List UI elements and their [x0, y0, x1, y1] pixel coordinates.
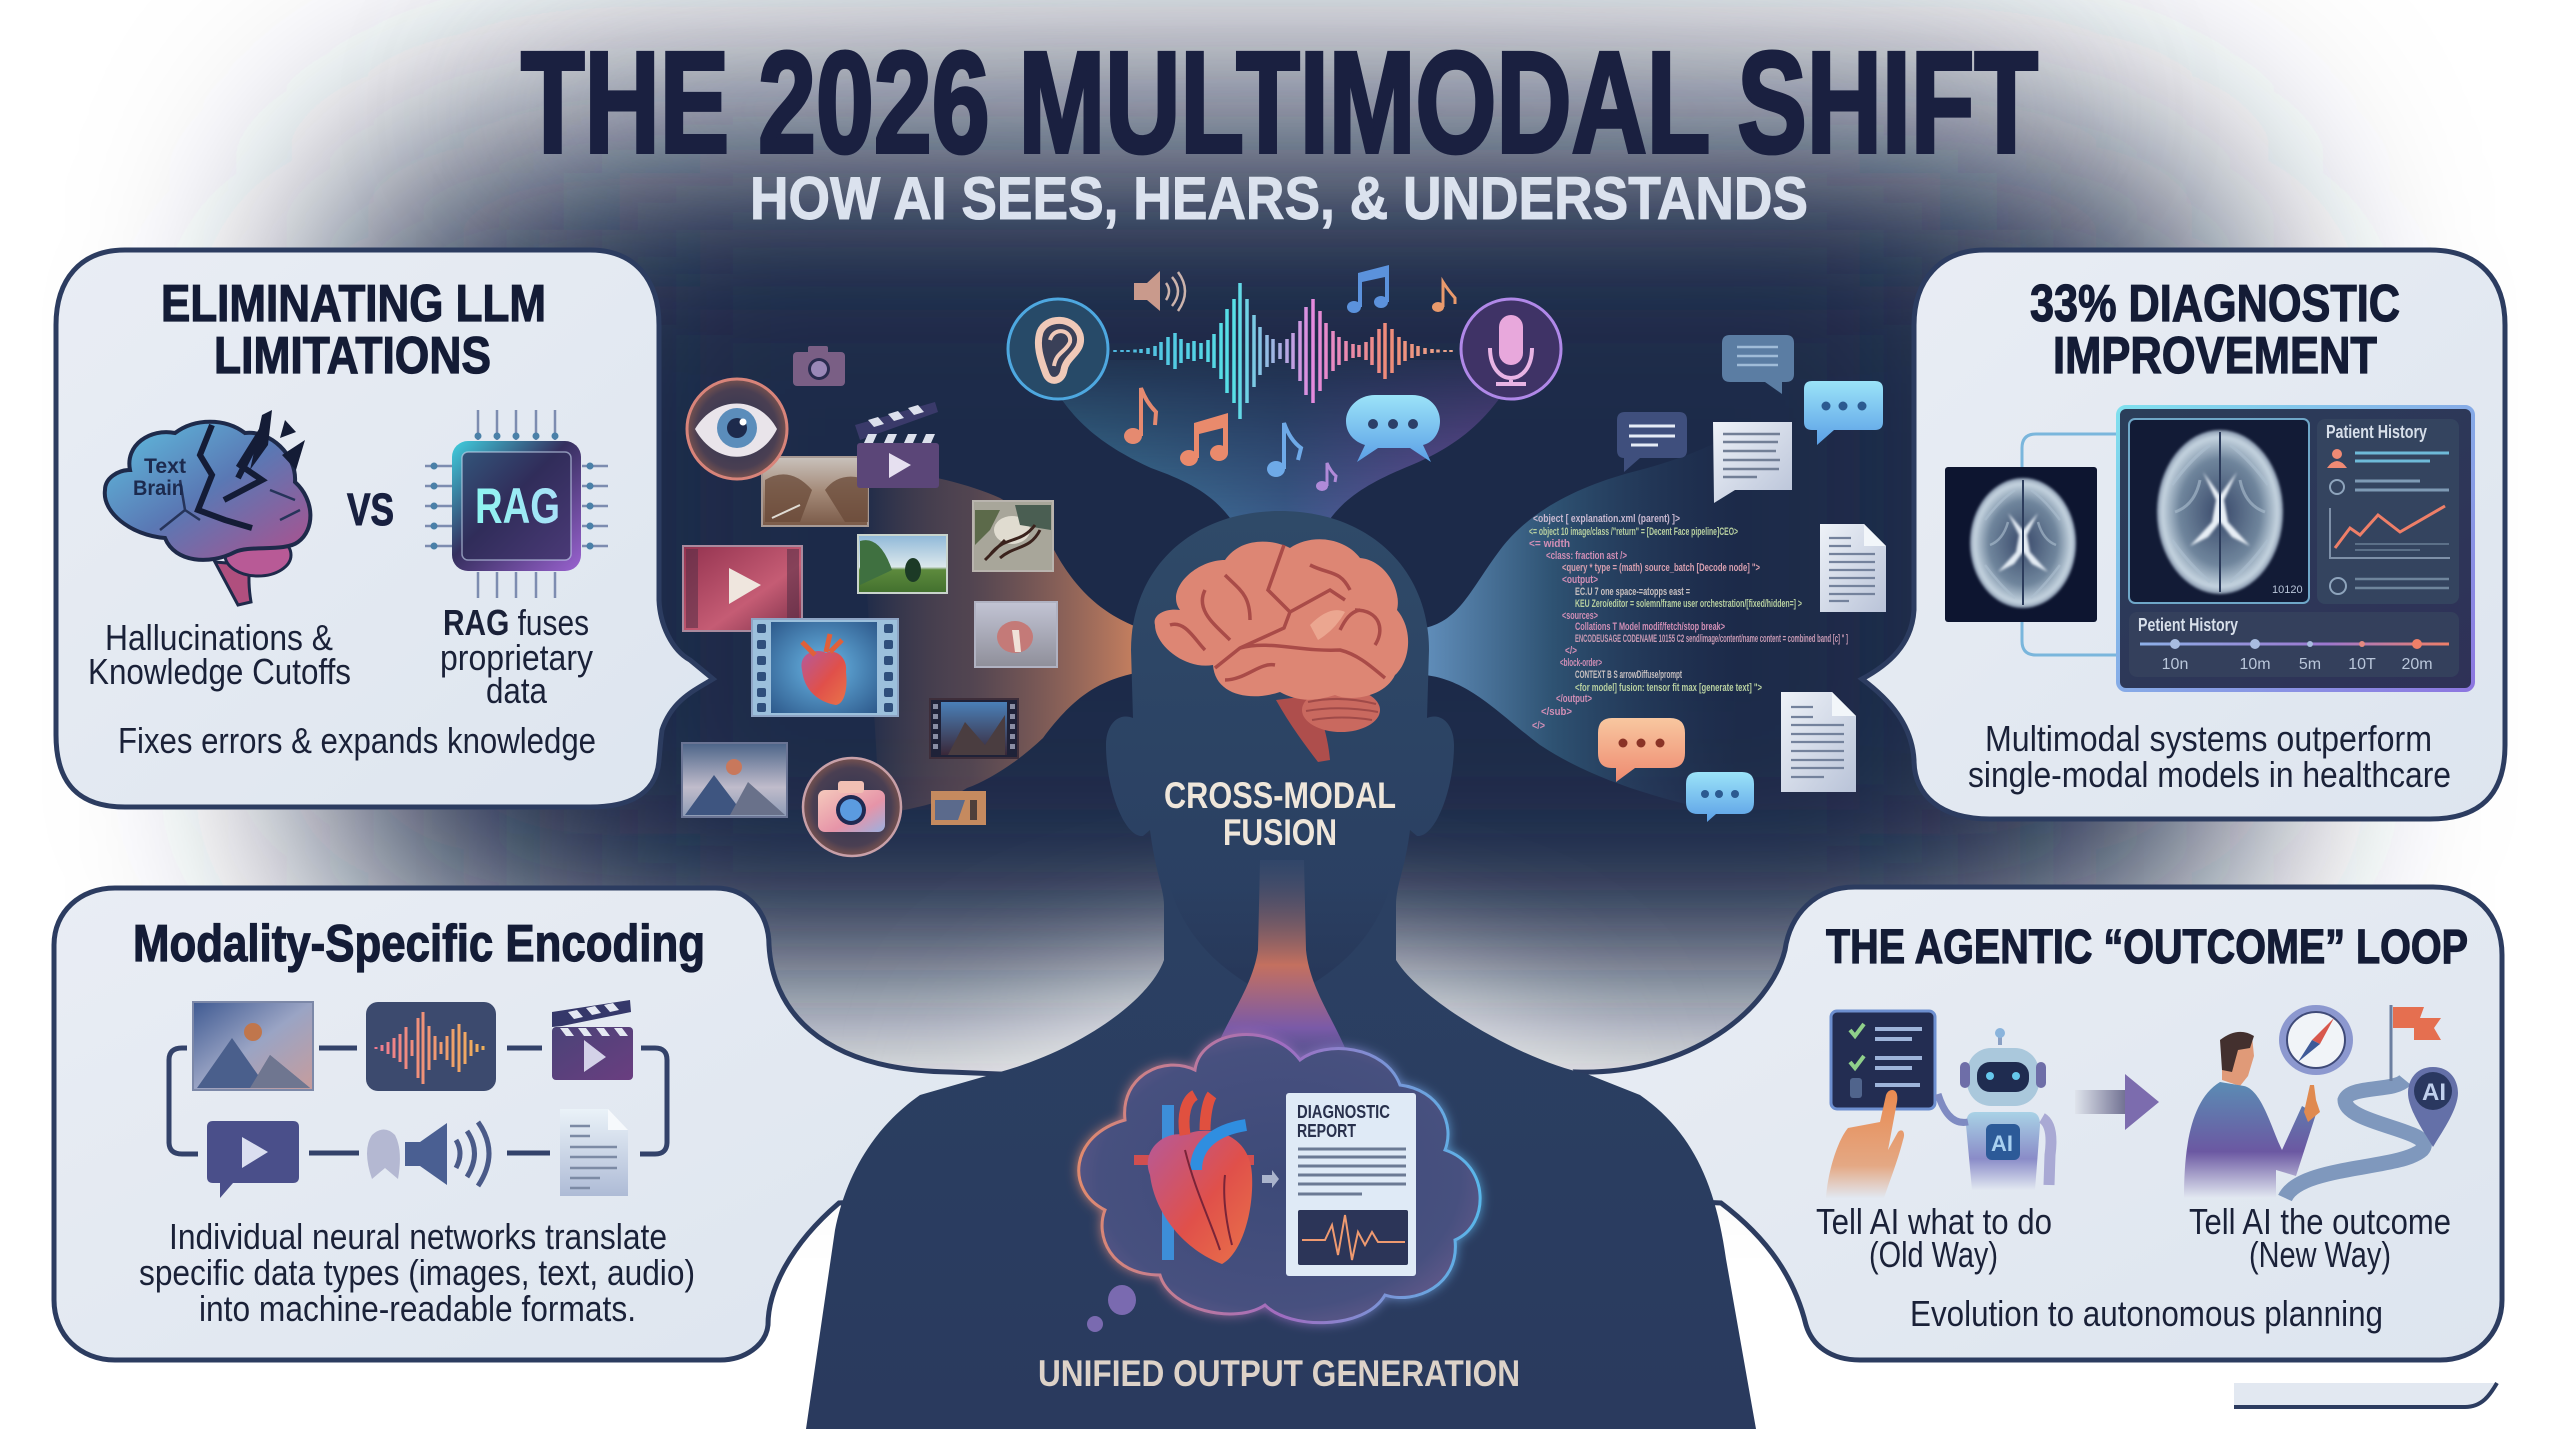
- caption: RAG fuses: [440, 602, 593, 711]
- encoding loop connectors: [169, 1048, 667, 1154]
- caption: specific data types (images, text, audio): [139, 1252, 695, 1293]
- icon: small camera: [793, 346, 845, 386]
- caption: RAG fuses: data: [486, 670, 548, 711]
- takeaway: Evolution to autonomous planning: [1910, 1293, 2383, 1334]
- label: Text: [144, 455, 186, 478]
- photo: green landscape: [858, 535, 947, 593]
- photo: dusk road: [973, 501, 1053, 571]
- caption: single-modal models in healthcare: [1968, 754, 2451, 795]
- timeline card: [2129, 612, 2459, 677]
- video: dark film: [930, 699, 1018, 758]
- code snippet: <block-order>: [1560, 657, 1602, 669]
- small arrow: [1262, 1170, 1279, 1188]
- heading: [2030, 275, 2400, 385]
- corner fragment: [2234, 1383, 2497, 1407]
- icon: document: [560, 1109, 628, 1196]
- icon: robot: [1938, 1028, 2051, 1190]
- subtitle: HOW AI SEES, HEARS, & UNDERSTANDS: [750, 165, 1808, 232]
- caption: Individual neural networks translate: [169, 1216, 667, 1257]
- caption: hallucinations: Hallucinations &: [105, 617, 333, 658]
- icon: blue note: [1267, 423, 1301, 477]
- monitor dashboard: [2118, 407, 2473, 690]
- timeline card: 10m: [2239, 656, 2271, 673]
- icon: clapperboard: [855, 402, 939, 488]
- icon: image: [193, 1002, 313, 1090]
- caption: RAG fuses: RAG fuses: [443, 602, 589, 643]
- photo: misty figure: [975, 602, 1057, 667]
- label: cross-modal fusion: FUSION: [1223, 812, 1337, 853]
- icon: flag: [2391, 1005, 2441, 1081]
- central brain: [1155, 539, 1408, 762]
- icon: camera: [803, 758, 901, 856]
- icon: eye: [687, 379, 787, 479]
- heading: IMPROVEMENT: [2053, 327, 2377, 385]
- timeline card: 10n: [2162, 656, 2188, 673]
- caption: old way: (Old Way): [1869, 1234, 1998, 1275]
- code snippet: <query * type = (math) source_batch [Decode node] ">: [1562, 562, 1760, 574]
- timeline card: 20m: [2401, 656, 2433, 673]
- heading: Modality-Specific Encoding: [133, 915, 705, 973]
- label: cross-modal fusion: [1164, 775, 1396, 853]
- thought dots: [1087, 1285, 1136, 1332]
- icon: speaker: [367, 1122, 489, 1186]
- timeline card: Petient History: [2138, 615, 2238, 635]
- diagnostic report: [1286, 1093, 1416, 1276]
- patient history card: Patient History: [2326, 422, 2427, 442]
- panel: eliminating LLM limitations: [56, 250, 713, 807]
- caption: old way: [1816, 1201, 2052, 1275]
- caption: [1968, 718, 2451, 795]
- audio waveform: [1115, 283, 1451, 419]
- code snippet: <for model] fusion: tensor fit max [generate text] ">: [1575, 682, 1762, 694]
- thought cloud: [1079, 1035, 1480, 1332]
- icon: person: [2184, 1032, 2320, 1198]
- versus: VS: [347, 484, 394, 535]
- label: cross-modal fusion: CROSS-MODAL: [1164, 775, 1396, 816]
- takeaway: Fixes errors & expands knowledge: [118, 720, 596, 761]
- icon: robot: AI: [1991, 1131, 2013, 1156]
- code snippet: Collations T Model modif/fetch/stop break>: [1575, 621, 1725, 633]
- icon: blue double note: [1347, 265, 1389, 313]
- code snippet: <sources>: [1562, 610, 1598, 622]
- icon: document: [1820, 524, 1886, 612]
- large MRI scan: [2129, 419, 2309, 603]
- bubble: blue dots: [1686, 772, 1754, 822]
- icon: ear: [1008, 299, 1108, 399]
- icon: small orange note: [1432, 282, 1455, 312]
- caption: Multimodal systems outperform: [1985, 718, 2432, 759]
- small MRI scan: [1945, 467, 2097, 622]
- bubble: orange dots: [1598, 718, 1685, 782]
- caption: into machine-readable formats.: [199, 1288, 636, 1329]
- code snippet: <= object 10 image/class /"return" = [Decent Face pipeline]CEO>: [1529, 526, 1738, 538]
- icon: waveform box: [366, 1002, 496, 1091]
- caption: RAG fuses: proprietary: [440, 637, 593, 678]
- icon: microphone: [1461, 299, 1561, 399]
- icon: location pin: AI: [2422, 1079, 2446, 1106]
- patient history card: [2317, 419, 2459, 604]
- icon: video bubble: [207, 1121, 299, 1198]
- code snippet: ENCODEUSAGE CODENAME 10155 C2 send/image/content/name content = combined band [c] " ]: [1575, 633, 1848, 645]
- photo: road: [762, 457, 868, 526]
- bubble: dark lines: [1617, 412, 1687, 472]
- caption: new way: (New Way): [2249, 1234, 2391, 1275]
- code snippet: </sub>: [1541, 706, 1572, 718]
- panel: modality-specific encoding: [54, 888, 1000, 1360]
- diagnostic report: REPORT: [1297, 1121, 1356, 1141]
- heading: LIMITATIONS: [214, 327, 491, 385]
- code snippet: <output>: [1562, 574, 1598, 586]
- video: pink play: [683, 546, 802, 631]
- caption: new way: Tell AI the outcome: [2189, 1201, 2451, 1242]
- code snippet: KEU Zero/editor = solemn/frame user orchestration/[fixed/hidden=] >: [1575, 598, 1802, 610]
- icon: orange double note: [1180, 413, 1228, 466]
- icon: RAG chip: RAG: [475, 478, 560, 534]
- icon: RAG chip: [425, 410, 608, 598]
- code snippet: </>: [1565, 645, 1577, 657]
- timeline card: 5m: [2299, 656, 2321, 673]
- caption: old way: Tell AI what to do: [1816, 1201, 2052, 1242]
- caption: hallucinations: Knowledge Cutoffs: [88, 651, 351, 692]
- code snippet: <= width: [1529, 538, 1570, 550]
- diagnostic report: DIAGNOSTIC: [1297, 1102, 1390, 1122]
- panel: 33% diagnostic improvement: [1862, 250, 2505, 819]
- heading: [161, 275, 546, 385]
- code snippet: <class: fraction ast />: [1546, 550, 1627, 562]
- video: heart film: [752, 619, 898, 716]
- icon: checklist: [1831, 1011, 1935, 1109]
- head and body silhouette: [806, 511, 1756, 1429]
- flow: text stream: [1425, 435, 1760, 820]
- bubble: cyan dots: [1804, 381, 1883, 445]
- heading: ELIMINATING LLM: [161, 275, 546, 333]
- flow: visual stream: [860, 470, 1140, 815]
- label: Brain: [133, 477, 184, 500]
- photo: mountain: [682, 743, 787, 817]
- icon: location pin: [2408, 1067, 2458, 1147]
- icon: speaker: [1134, 271, 1185, 311]
- icon: orange note: [1124, 388, 1156, 444]
- caption: [139, 1216, 695, 1329]
- icon: document: [1781, 692, 1856, 792]
- bubble: white lines: [1713, 422, 1792, 503]
- icon: purple note: [1316, 463, 1336, 491]
- photo: orange thumbnail: [931, 791, 986, 825]
- large MRI scan: 10120: [2272, 584, 2303, 596]
- code snippet: CONTEXT B S arrowDiffuse/prompt: [1575, 669, 1682, 681]
- title: THE 2026 MULTIMODAL SHIFT: [521, 22, 2038, 183]
- code snippet: </>: [1532, 720, 1545, 732]
- icon: compass: [2279, 1005, 2353, 1075]
- arrow: [2075, 1074, 2159, 1130]
- neck glow: [1212, 860, 1350, 1060]
- icon: hand: [1826, 1090, 1904, 1198]
- icon: road: [2285, 1080, 2424, 1198]
- code snippet: EC.U 7 one space-=atopps east =: [1575, 586, 1690, 598]
- caption: hallucinations: [88, 617, 351, 692]
- caption: new way: [2189, 1201, 2451, 1275]
- code snippet: </output>: [1556, 693, 1592, 705]
- label: [133, 455, 186, 500]
- heading: 33% DIAGNOSTIC: [2030, 275, 2400, 333]
- code snippet: <object [ explanation.xml (parent) ]>: [1533, 513, 1680, 525]
- flow: audio stream: [1062, 360, 1499, 518]
- icon: cracked text brain: [105, 410, 310, 605]
- timeline card: 10T: [2348, 656, 2376, 673]
- code snippet: [1529, 513, 1848, 732]
- icon: heart: [1134, 1095, 1254, 1264]
- panel: agentic outcome loop: [1577, 887, 2502, 1360]
- icon: chat bubble: [1346, 395, 1440, 462]
- label: unified output generation: UNIFIED OUTPUT GENERATION: [1038, 1353, 1520, 1394]
- connector lines: [2022, 434, 2118, 655]
- icon: clapperboard: [552, 1000, 633, 1080]
- bubble: lined slate: [1722, 335, 1794, 394]
